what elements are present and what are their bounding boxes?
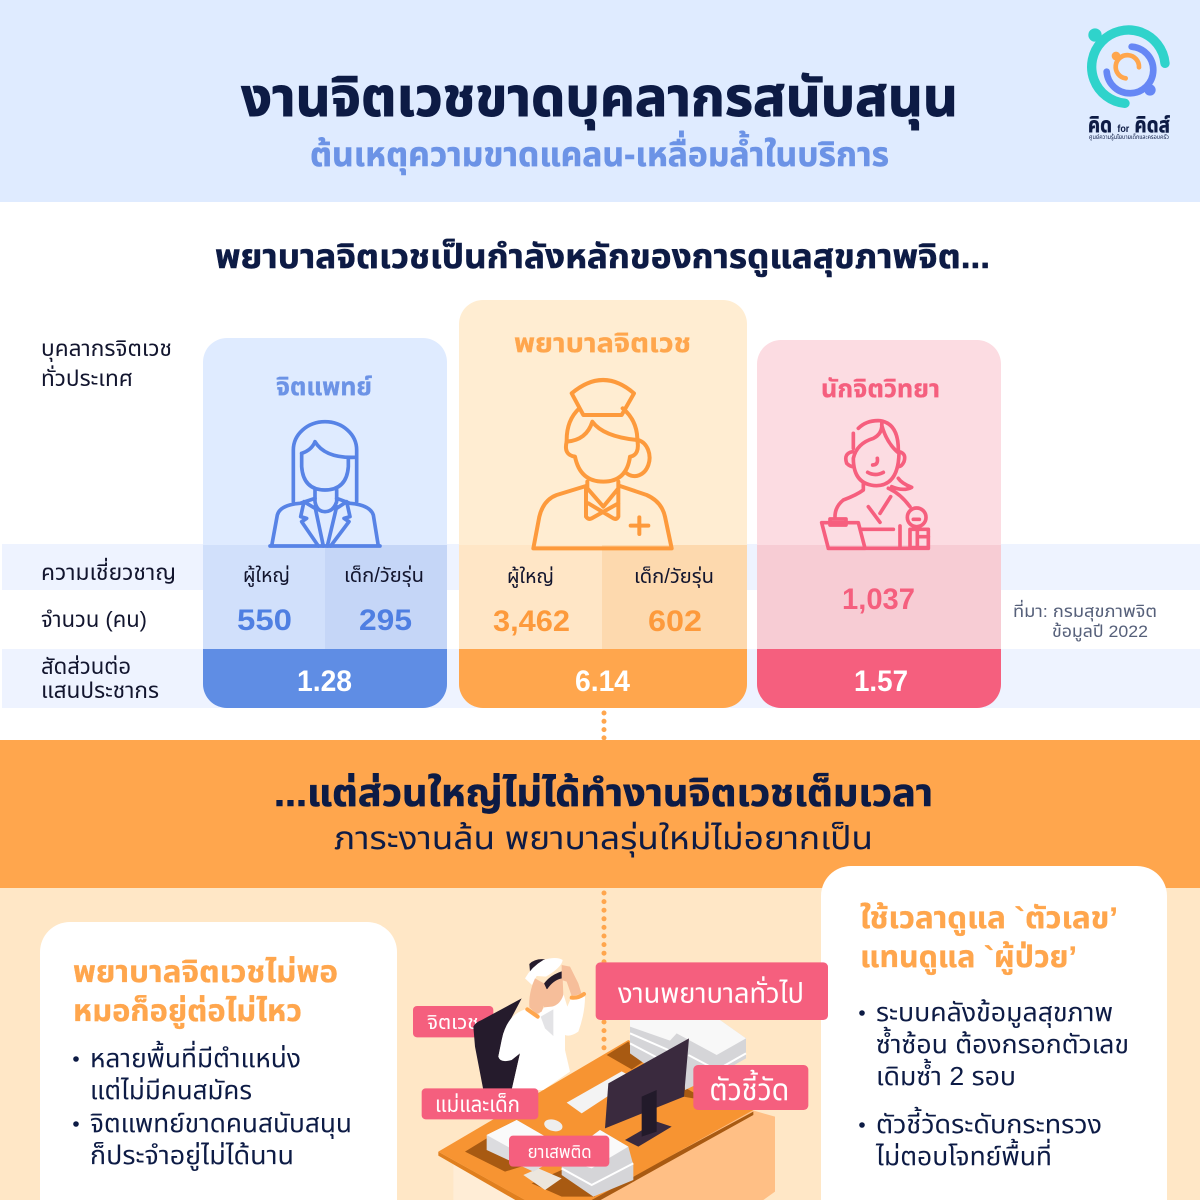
section heading: พยาบาลจิตเวชเป็นกำลังหลักของการดูแลสุขภาพจิต... (215, 238, 990, 277)
tag: drugs: ยาเสพติด (528, 1142, 592, 1162)
right card heading (860, 902, 1118, 975)
collar (541, 1009, 553, 1036)
towel (525, 958, 563, 985)
psychiatrist counts (237, 604, 412, 637)
psychologists heading: นักจิตวิทยา (821, 375, 940, 403)
source note (1013, 599, 1157, 643)
left arm (529, 978, 549, 1014)
chair (473, 998, 522, 1090)
nurses counts: 602 (648, 605, 702, 638)
row labels (41, 336, 176, 703)
psychiatrist labels: ผู้ใหญ่ (243, 564, 290, 588)
band heading: ...แต่ส่วนใหญ่ไม่ได้ทำงานจิตเวชเต็มเวลา (274, 773, 933, 815)
panel: psychologists (757, 340, 1001, 708)
right card heading: ใช้เวลาดูแล `ตัวเลข’ (860, 902, 1118, 936)
tag: mother and child (422, 1088, 538, 1119)
right arm (562, 965, 582, 996)
connector dots lower (602, 893, 606, 1048)
cuffs (527, 994, 584, 1017)
hair back (529, 959, 545, 975)
left card bullets (73, 1040, 352, 1171)
panel: psychiatrists (203, 338, 447, 708)
tag: psychiatry: จิตเวช (427, 1012, 479, 1034)
tag: general nursing (596, 962, 828, 1020)
nurses labels: ผู้ใหญ่ (507, 565, 554, 589)
left card bullets: ก็ประจำอยู่ไม่ได้นาน (90, 1140, 294, 1171)
psychiatrist labels: เด็ก/วัยรุ่น (344, 564, 424, 587)
row labels: ทั่วประเทศ (41, 364, 133, 391)
left card heading: หมอก็อยู่ต่อไม่ไหว (73, 994, 302, 1029)
tag: drugs (509, 1136, 609, 1167)
title: งานจิตเวชขาดบุคลากรสนับสนุน (241, 68, 958, 130)
illustration: overworked nurse at desk (413, 958, 828, 1200)
logo (1088, 28, 1170, 141)
icon: psychologist (822, 421, 928, 548)
band subheading: ภาระงานล้น พยาบาลรุ่นใหม่ไม่อยากเป็น (334, 820, 873, 857)
monitor (605, 1038, 689, 1147)
lower background (0, 888, 1200, 1200)
row labels: สัดส่วนต่อ (41, 654, 131, 679)
row labels: บุคลากรจิตเวช (41, 336, 172, 362)
paper stacks: front (487, 1120, 633, 1197)
right card heading: แทนดูแล `ผู้ป่วย’ (860, 941, 1077, 975)
right card bullets: ซ้ำซ้อน ต้องกรอกตัวเลข (876, 1026, 1129, 1059)
logo: ศูนย์ความรู้นโยบายเด็กและครอบครัว (1089, 134, 1169, 141)
left card (40, 922, 397, 1200)
paper stack: back (630, 1020, 746, 1090)
left card heading: พยาบาลจิตเวชไม่พอ (73, 956, 338, 989)
psychologists count: 1,037 (842, 583, 915, 616)
nurses labels: เด็ก/วัยรุ่น (634, 565, 714, 588)
right card (821, 866, 1167, 1200)
person and chair (473, 958, 585, 1090)
logo: คิด for คิดส์ (1088, 114, 1170, 137)
psychiatrist heading: จิตแพทย์ (276, 373, 372, 401)
psychiatrist counts: 550 (237, 604, 292, 637)
shirt (498, 992, 585, 1090)
icon: nurse (533, 380, 672, 548)
source note: ข้อมูลปี 2022 (1052, 621, 1148, 643)
row labels: ความเชี่ยวชาญ (41, 557, 176, 585)
tag: indicators (693, 1065, 808, 1110)
nurses labels (507, 565, 714, 589)
left card bullets: จิตแพทย์ขาดคนสนับสนุน (90, 1108, 352, 1139)
nurses ratio: 6.14 (575, 665, 630, 698)
right card bullets (859, 997, 1129, 1171)
psychologists ratio: 1.57 (854, 665, 908, 698)
tag: indicators: ตัวชี้วัด (709, 1069, 789, 1107)
right card bullets: ตัวชี้วัดระดับกระทรวง (876, 1106, 1102, 1139)
right card bullets: ระบบคลังข้อมูลสุขภาพ (876, 997, 1113, 1028)
psychiatrist labels (243, 564, 424, 588)
connector dots upper (602, 713, 606, 738)
nurses heading: พยาบาลจิตเวช (514, 328, 691, 358)
nurses counts: 3,462 (493, 605, 570, 638)
left card heading (73, 956, 338, 1029)
psychiatrist ratio: 1.28 (297, 665, 352, 698)
orange band (0, 740, 1200, 888)
left card bullets: หลายพื้นที่มีตำแหน่ง (90, 1040, 301, 1073)
source note: ที่มา: กรมสุขภาพจิต (1013, 599, 1157, 622)
hair front (541, 971, 563, 991)
nurses counts (493, 605, 702, 638)
keyboard (567, 1071, 635, 1113)
face (544, 978, 563, 1007)
header band (0, 0, 1200, 202)
row labels: แสนประชากร (41, 678, 159, 703)
row labels: จำนวน (คน) (41, 607, 147, 632)
subtitle: ต้นเหตุความขาดแคลน-เหลื่อมล้ำในบริการ (310, 130, 889, 175)
panel: psychiatric nurses (459, 300, 747, 708)
tag: psychiatry (413, 1006, 493, 1037)
left card bullets: แต่ไม่มีคนสมัคร (90, 1075, 252, 1105)
table row bands (2, 544, 1200, 708)
psychiatrist counts: 295 (359, 604, 412, 637)
tag: general nursing: งานพยาบาลทั่วไป (618, 975, 804, 1009)
right card bullets: ไม่ตอบโจทย์พื้นที่ (875, 1138, 1052, 1171)
right card bullets: เดิมซ้ำ 2 รอบ (876, 1058, 1016, 1091)
tag: mother and child: แม่และเด็ก (435, 1092, 520, 1117)
mouse (543, 1117, 564, 1133)
icon: psychiatrist (270, 422, 380, 546)
desk (438, 1040, 775, 1200)
